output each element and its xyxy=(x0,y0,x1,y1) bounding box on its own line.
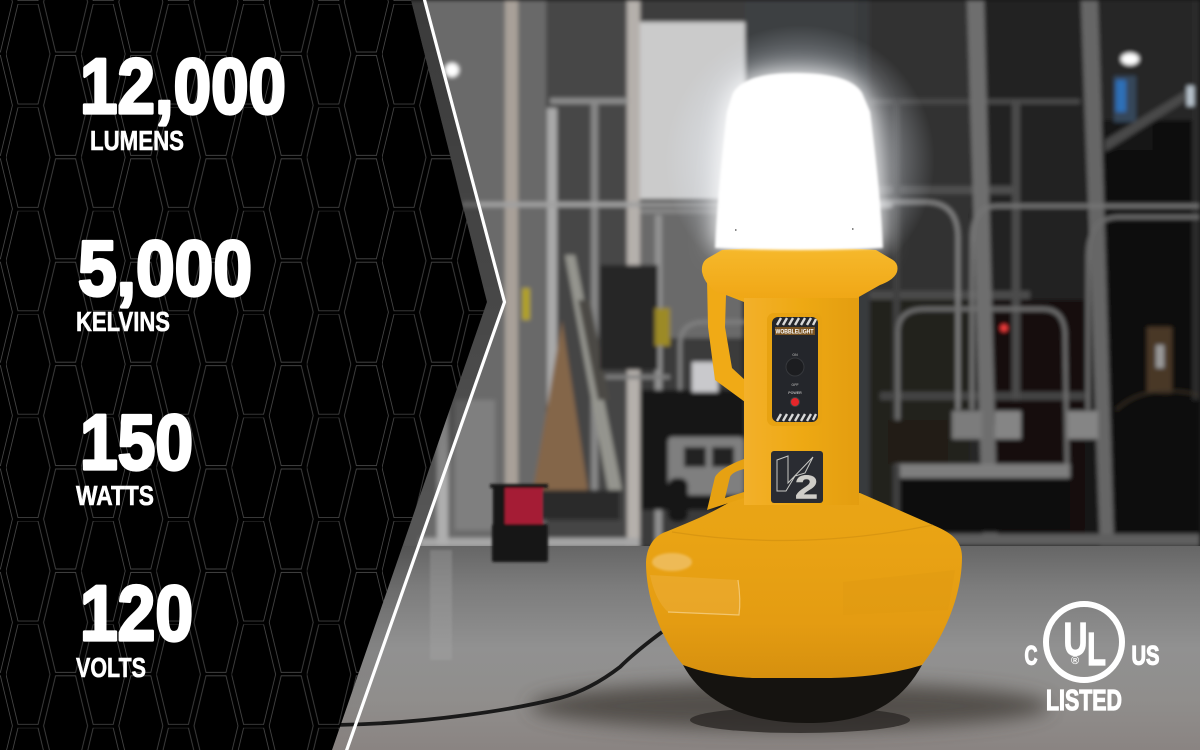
left black hexagon panel xyxy=(0,0,500,750)
body column xyxy=(744,290,859,505)
on label: ON xyxy=(792,353,798,357)
base highlight xyxy=(652,553,692,571)
floor reflection xyxy=(430,550,452,660)
blue figure and ceiling light xyxy=(1114,76,1136,122)
top hazard stripes xyxy=(777,318,816,325)
glowing globe xyxy=(715,73,883,250)
UL listed logo xyxy=(1024,604,1160,717)
spec: 150 watts: 150 xyxy=(80,398,193,486)
bottom hazard stripes xyxy=(777,414,816,421)
letter c: C xyxy=(1024,640,1038,670)
brand bar xyxy=(775,327,815,335)
base left grip edge xyxy=(668,580,740,615)
cart shelf xyxy=(900,464,1070,478)
upper handle xyxy=(707,280,745,402)
junction boxes xyxy=(952,411,982,439)
off label: OFF xyxy=(791,383,799,387)
spec: 120 volts: VOLTS xyxy=(76,652,146,683)
globe screws xyxy=(735,228,854,231)
power cord xyxy=(336,632,662,725)
UL U: U xyxy=(1064,613,1088,665)
spec: 5,000 kelvins: KELVINS xyxy=(76,306,170,337)
spec: 12,000 lumens xyxy=(80,42,286,156)
spec: 12,000 lumens: LUMENS xyxy=(90,125,184,156)
wire spool xyxy=(490,484,548,562)
power label: POWER xyxy=(788,391,802,395)
base right grip xyxy=(843,570,955,615)
lower yellow base xyxy=(646,493,962,678)
numeral 2: 2 xyxy=(795,468,818,506)
white chevron outline xyxy=(346,0,504,750)
spec: 12,000 lumens: 12,000 xyxy=(80,42,286,130)
baseboard xyxy=(420,538,640,547)
framing studs and rails xyxy=(505,0,518,490)
contact shadow xyxy=(690,707,910,733)
UL ring xyxy=(1046,604,1122,680)
panel recess xyxy=(767,313,822,426)
collar xyxy=(702,247,898,298)
base left grip xyxy=(650,575,740,615)
spec: 120 volts: 120 xyxy=(80,569,193,657)
power led xyxy=(790,398,800,406)
V outline xyxy=(777,456,813,491)
conduit pipes xyxy=(880,202,958,410)
dark crates xyxy=(600,265,658,370)
base shoulder line xyxy=(672,525,933,541)
spec: 150 watts: WATTS xyxy=(76,480,154,511)
registered mark: ® xyxy=(1071,655,1079,667)
UL L: L xyxy=(1087,623,1106,675)
spec: 150 watts xyxy=(76,398,193,511)
switch xyxy=(786,358,804,376)
black rubber base xyxy=(683,665,922,723)
background photo: construction site xyxy=(330,0,1200,750)
spec: 120 volts xyxy=(76,569,193,683)
small lights xyxy=(445,63,459,77)
listed word: LISTED xyxy=(1046,685,1122,717)
work light xyxy=(646,25,962,723)
floor xyxy=(330,546,1200,750)
control panel xyxy=(772,317,818,422)
wall sections xyxy=(400,0,1200,560)
inner light bloom xyxy=(715,73,883,248)
ladder and cardboard xyxy=(533,320,588,490)
spec: 5,000 kelvins: 5,000 xyxy=(78,224,252,312)
outer light halo xyxy=(665,25,935,295)
lower handle xyxy=(707,459,744,510)
wall plate xyxy=(1147,327,1172,393)
letters us: US xyxy=(1132,640,1160,670)
brand name: WOBBLELIGHT xyxy=(776,330,814,336)
transparent band beside the black panel xyxy=(332,0,505,750)
V2 badge xyxy=(771,451,823,506)
lamp floor shadow xyxy=(530,682,1050,730)
